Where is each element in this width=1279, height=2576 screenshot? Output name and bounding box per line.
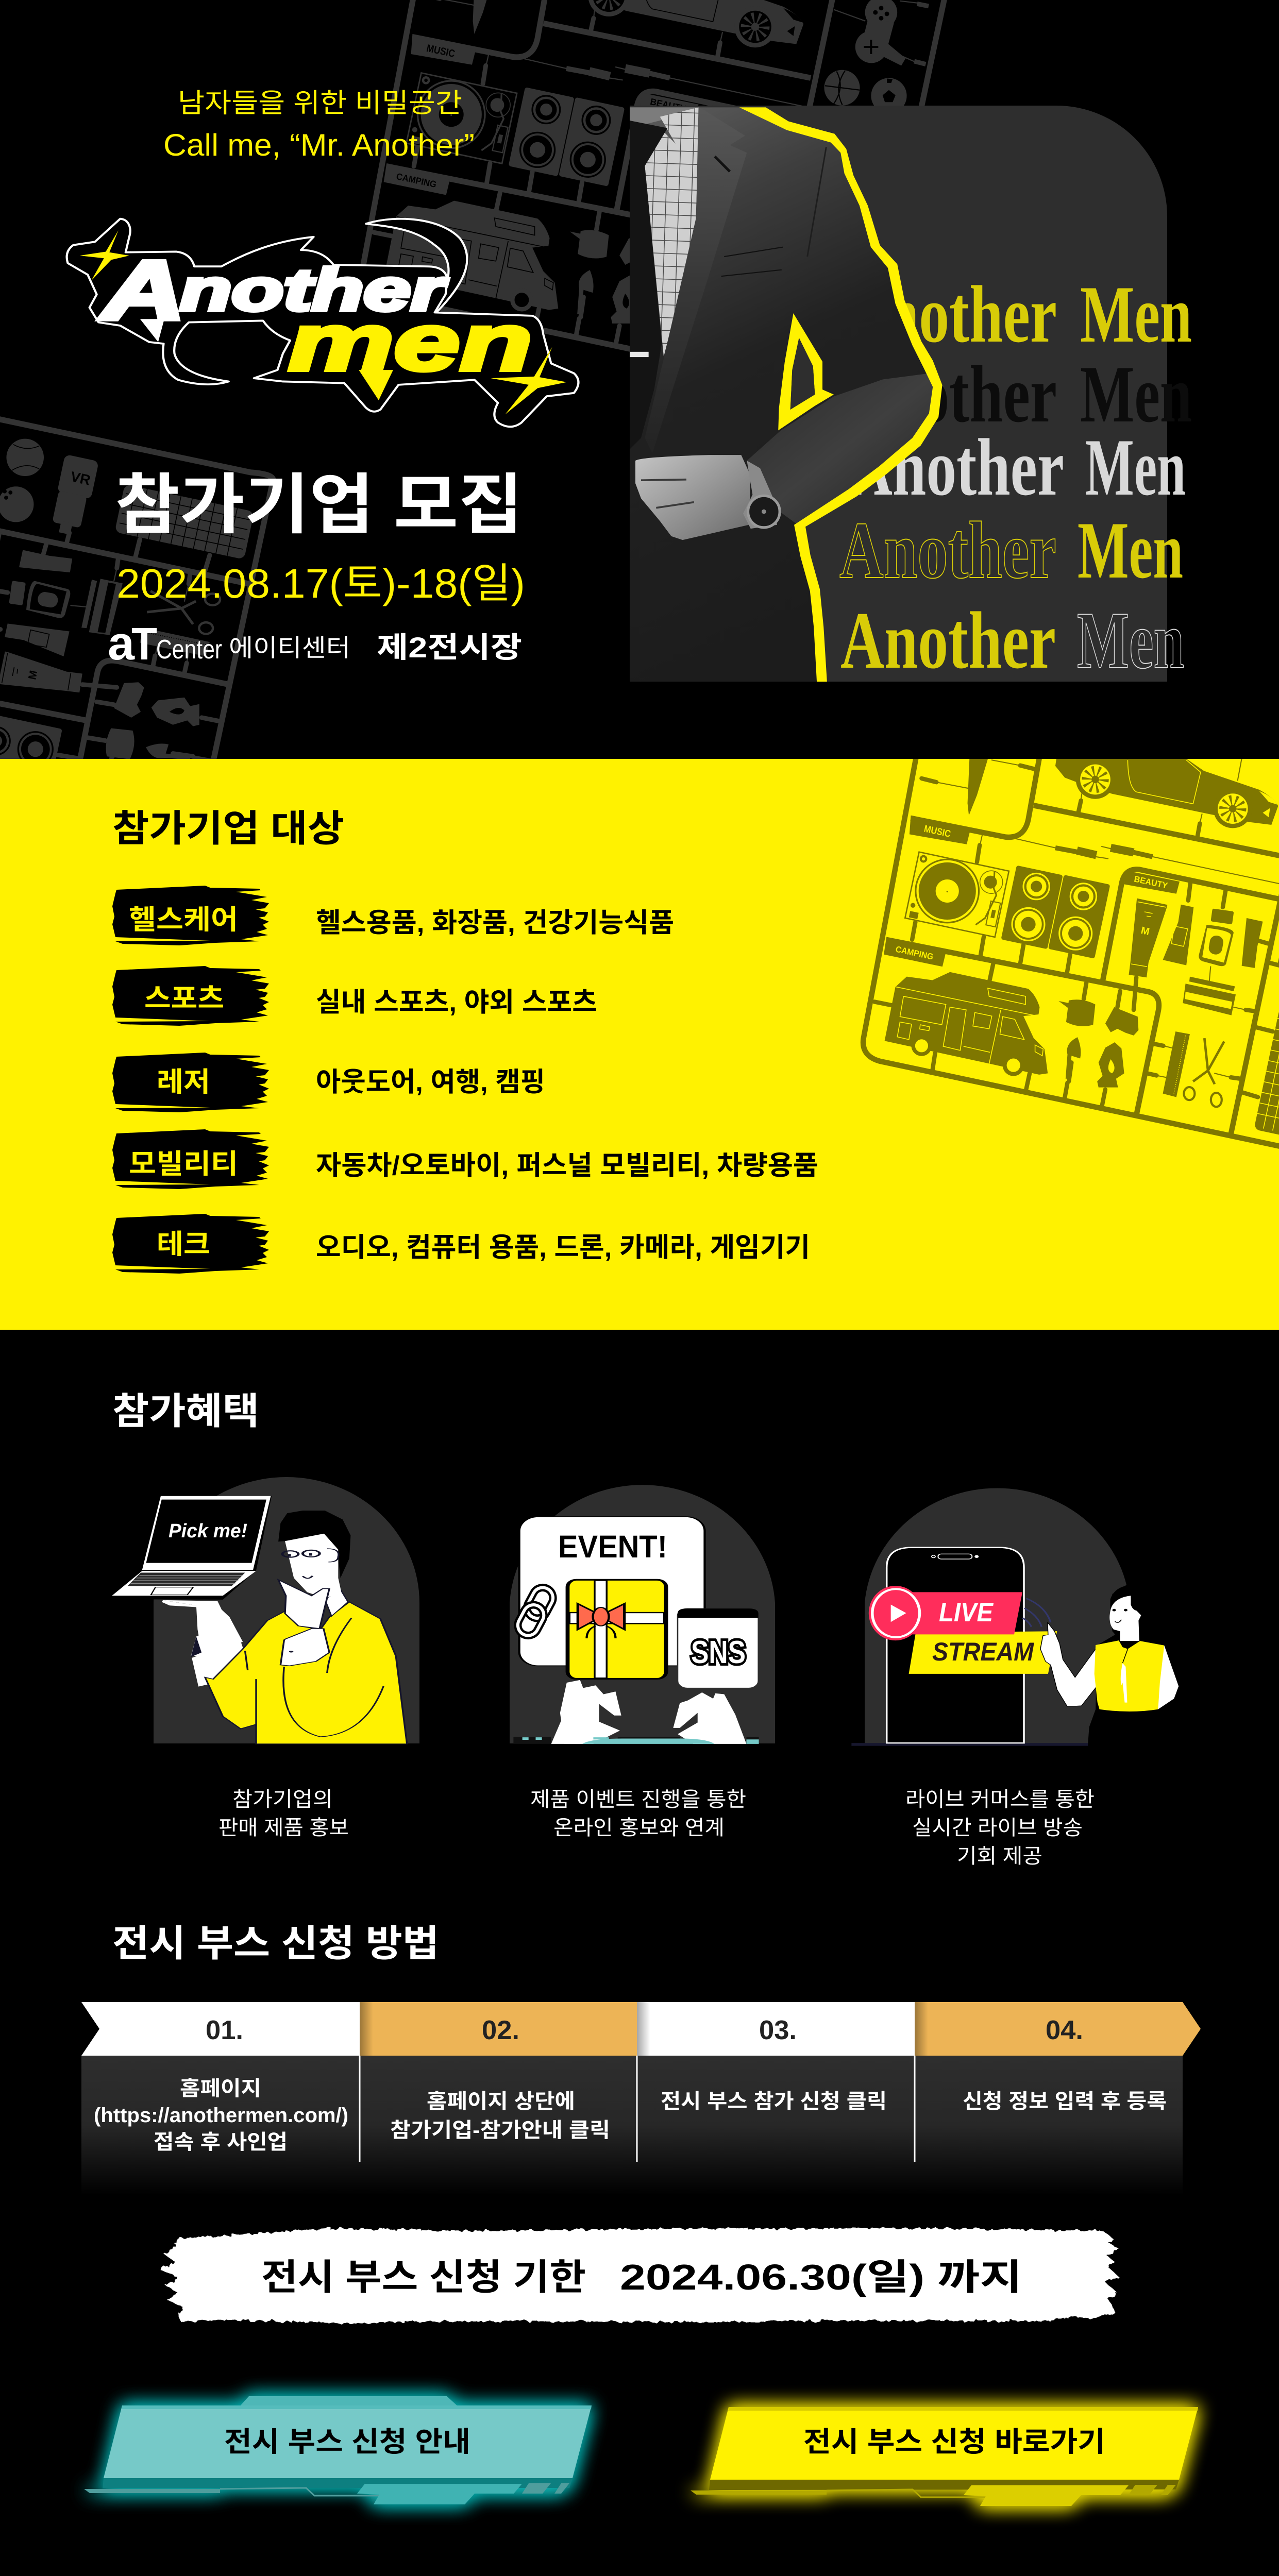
hero panel <box>630 106 1167 682</box>
logo: Another men <box>67 219 578 427</box>
repeated wordmark rows: Another <box>840 596 1056 686</box>
illustration: live stream: LIVE <box>939 1598 994 1628</box>
row: leisure: 아웃도어, 여행, 캠핑 <box>316 1067 545 1097</box>
deadline banner: 전시 부스 신청 기한 <box>261 2257 586 2297</box>
illustration: event and SNS: EVENT! <box>558 1529 667 1564</box>
row: mobility: 자동차/오토바이, 퍼스널 모빌리티, 차량용품 <box>316 1151 818 1181</box>
heading: 참가기업 대상 <box>112 808 344 850</box>
tagline <box>163 89 475 162</box>
button: apply now <box>691 2407 1198 2506</box>
row: leisure <box>112 1053 545 1112</box>
event date: 2024.08.17(토)-18(일) <box>116 561 525 606</box>
captions: 실시간 라이브 방송 <box>912 1817 1083 1839</box>
row: mobility <box>112 1129 818 1189</box>
illustration: event and SNS: SNS <box>691 1635 746 1670</box>
repeated wordmark rows: Another <box>839 505 1056 596</box>
repeated wordmark rows: Men <box>1080 349 1192 439</box>
captions: 라이브 커머스를 통한 <box>905 1788 1095 1811</box>
main title: 참가기업 모집 <box>115 468 523 542</box>
deadline banner <box>160 2228 1119 2324</box>
venue: Center <box>156 635 222 665</box>
captions: 참가기업의 <box>232 1788 333 1811</box>
row: leisure: 레저 <box>157 1067 210 1097</box>
step texts: 접속 후 사인업 <box>154 2131 288 2154</box>
step texts: 신청 정보 입력 후 등록 <box>963 2090 1167 2113</box>
step header chevrons <box>81 2002 1201 2056</box>
step texts <box>94 2077 1167 2154</box>
repeated wordmark rows: Another <box>842 349 1057 439</box>
repeated wordmark rows: Another <box>842 269 1057 360</box>
photo: man in suit <box>630 107 943 682</box>
button: booth guide <box>84 2396 592 2504</box>
step texts: 홈페이지 <box>180 2077 261 2100</box>
button: booth guide: 전시 부스 신청 안내 <box>224 2427 470 2458</box>
venue: T <box>131 618 157 669</box>
repeated wordmark rows: Men <box>1078 505 1183 596</box>
deadline banner: 2024.06.30(일) 까지 <box>620 2257 1022 2297</box>
venue: 에이티센터 <box>229 634 350 662</box>
background: plastic model kit, lower left <box>0 416 276 759</box>
venue: a <box>108 617 135 670</box>
repeated wordmark rows: Men <box>1080 269 1192 360</box>
captions: 기회 제공 <box>957 1845 1042 1868</box>
step texts: 전시 부스 참가 신청 클릭 <box>661 2090 887 2113</box>
captions: 제품 이벤트 진행을 통한 <box>530 1788 746 1811</box>
panel: benefits <box>111 1391 1236 1868</box>
hero section <box>0 0 1191 759</box>
repeated wordmark rows: Men <box>1077 596 1184 686</box>
illustration: event and SNS <box>510 1485 775 1744</box>
illustration: live stream: STREAM <box>932 1637 1034 1666</box>
row: tech: 오디오, 컴퓨터 용품, 드론, 카메라, 게임기기 <box>316 1233 810 1263</box>
logo: Another men: A <box>99 244 186 337</box>
captions: 판매 제품 홍보 <box>218 1817 349 1839</box>
panel: booth application steps <box>81 1923 1201 2195</box>
row: sports: 실내 스포츠, 야외 스포츠 <box>316 988 597 1018</box>
logo: Another men: men <box>288 297 532 387</box>
step numbers <box>206 2015 1083 2045</box>
row: sports: 스포츠 <box>144 984 224 1014</box>
step numbers: 01. <box>206 2015 243 2045</box>
step numbers: 03. <box>759 2015 797 2045</box>
icon: chain link <box>514 1584 557 1639</box>
row: tech: 테크 <box>157 1229 210 1260</box>
illustration: man with laptop <box>111 1477 419 1744</box>
row: healthcare: 헬스용품, 화장품, 건강기능식품 <box>316 908 674 938</box>
tagline: 남자들을 위한 비밀공간 <box>178 89 462 118</box>
row: healthcare <box>112 886 674 945</box>
captions <box>218 1788 1095 1868</box>
row: tech <box>112 1214 810 1274</box>
captions: 온라인 홍보와 연계 <box>553 1817 725 1839</box>
row: healthcare: 헬스케어 <box>129 905 238 935</box>
step body <box>81 2056 1183 2195</box>
background: plastic model kit, top <box>362 0 953 397</box>
step numbers: 04. <box>1046 2015 1083 2045</box>
repeated wordmark rows <box>839 269 1192 686</box>
repeated wordmark rows: Another <box>849 422 1064 513</box>
repeated wordmark rows: Men <box>1085 422 1186 513</box>
tagline: Call me, “Mr. Another” <box>163 128 475 162</box>
logo: Another men: nother <box>180 257 448 323</box>
heading: 참가혜택 <box>112 1391 259 1432</box>
panel: target companies (yellow) <box>0 703 1279 1330</box>
heading: 전시 부스 신청 방법 <box>112 1923 439 1964</box>
button: apply now: 전시 부스 신청 바로가기 <box>803 2427 1105 2458</box>
step texts: (https://anothermen.com/) <box>94 2104 348 2127</box>
row: mobility: 모빌리티 <box>129 1149 238 1179</box>
step texts: 참가기업-참가안내 클릭 <box>390 2119 610 2142</box>
row: sports <box>112 966 597 1026</box>
venue <box>108 617 522 670</box>
illustration: man with laptop: Pick me! <box>169 1520 247 1542</box>
illustration: live stream <box>851 1488 1236 1746</box>
background: plastic model kit on yellow <box>861 759 1279 1149</box>
step numbers: 02. <box>482 2015 519 2045</box>
venue: 제2전시장 <box>377 631 522 664</box>
step texts: 홈페이지 상단에 <box>427 2090 575 2113</box>
